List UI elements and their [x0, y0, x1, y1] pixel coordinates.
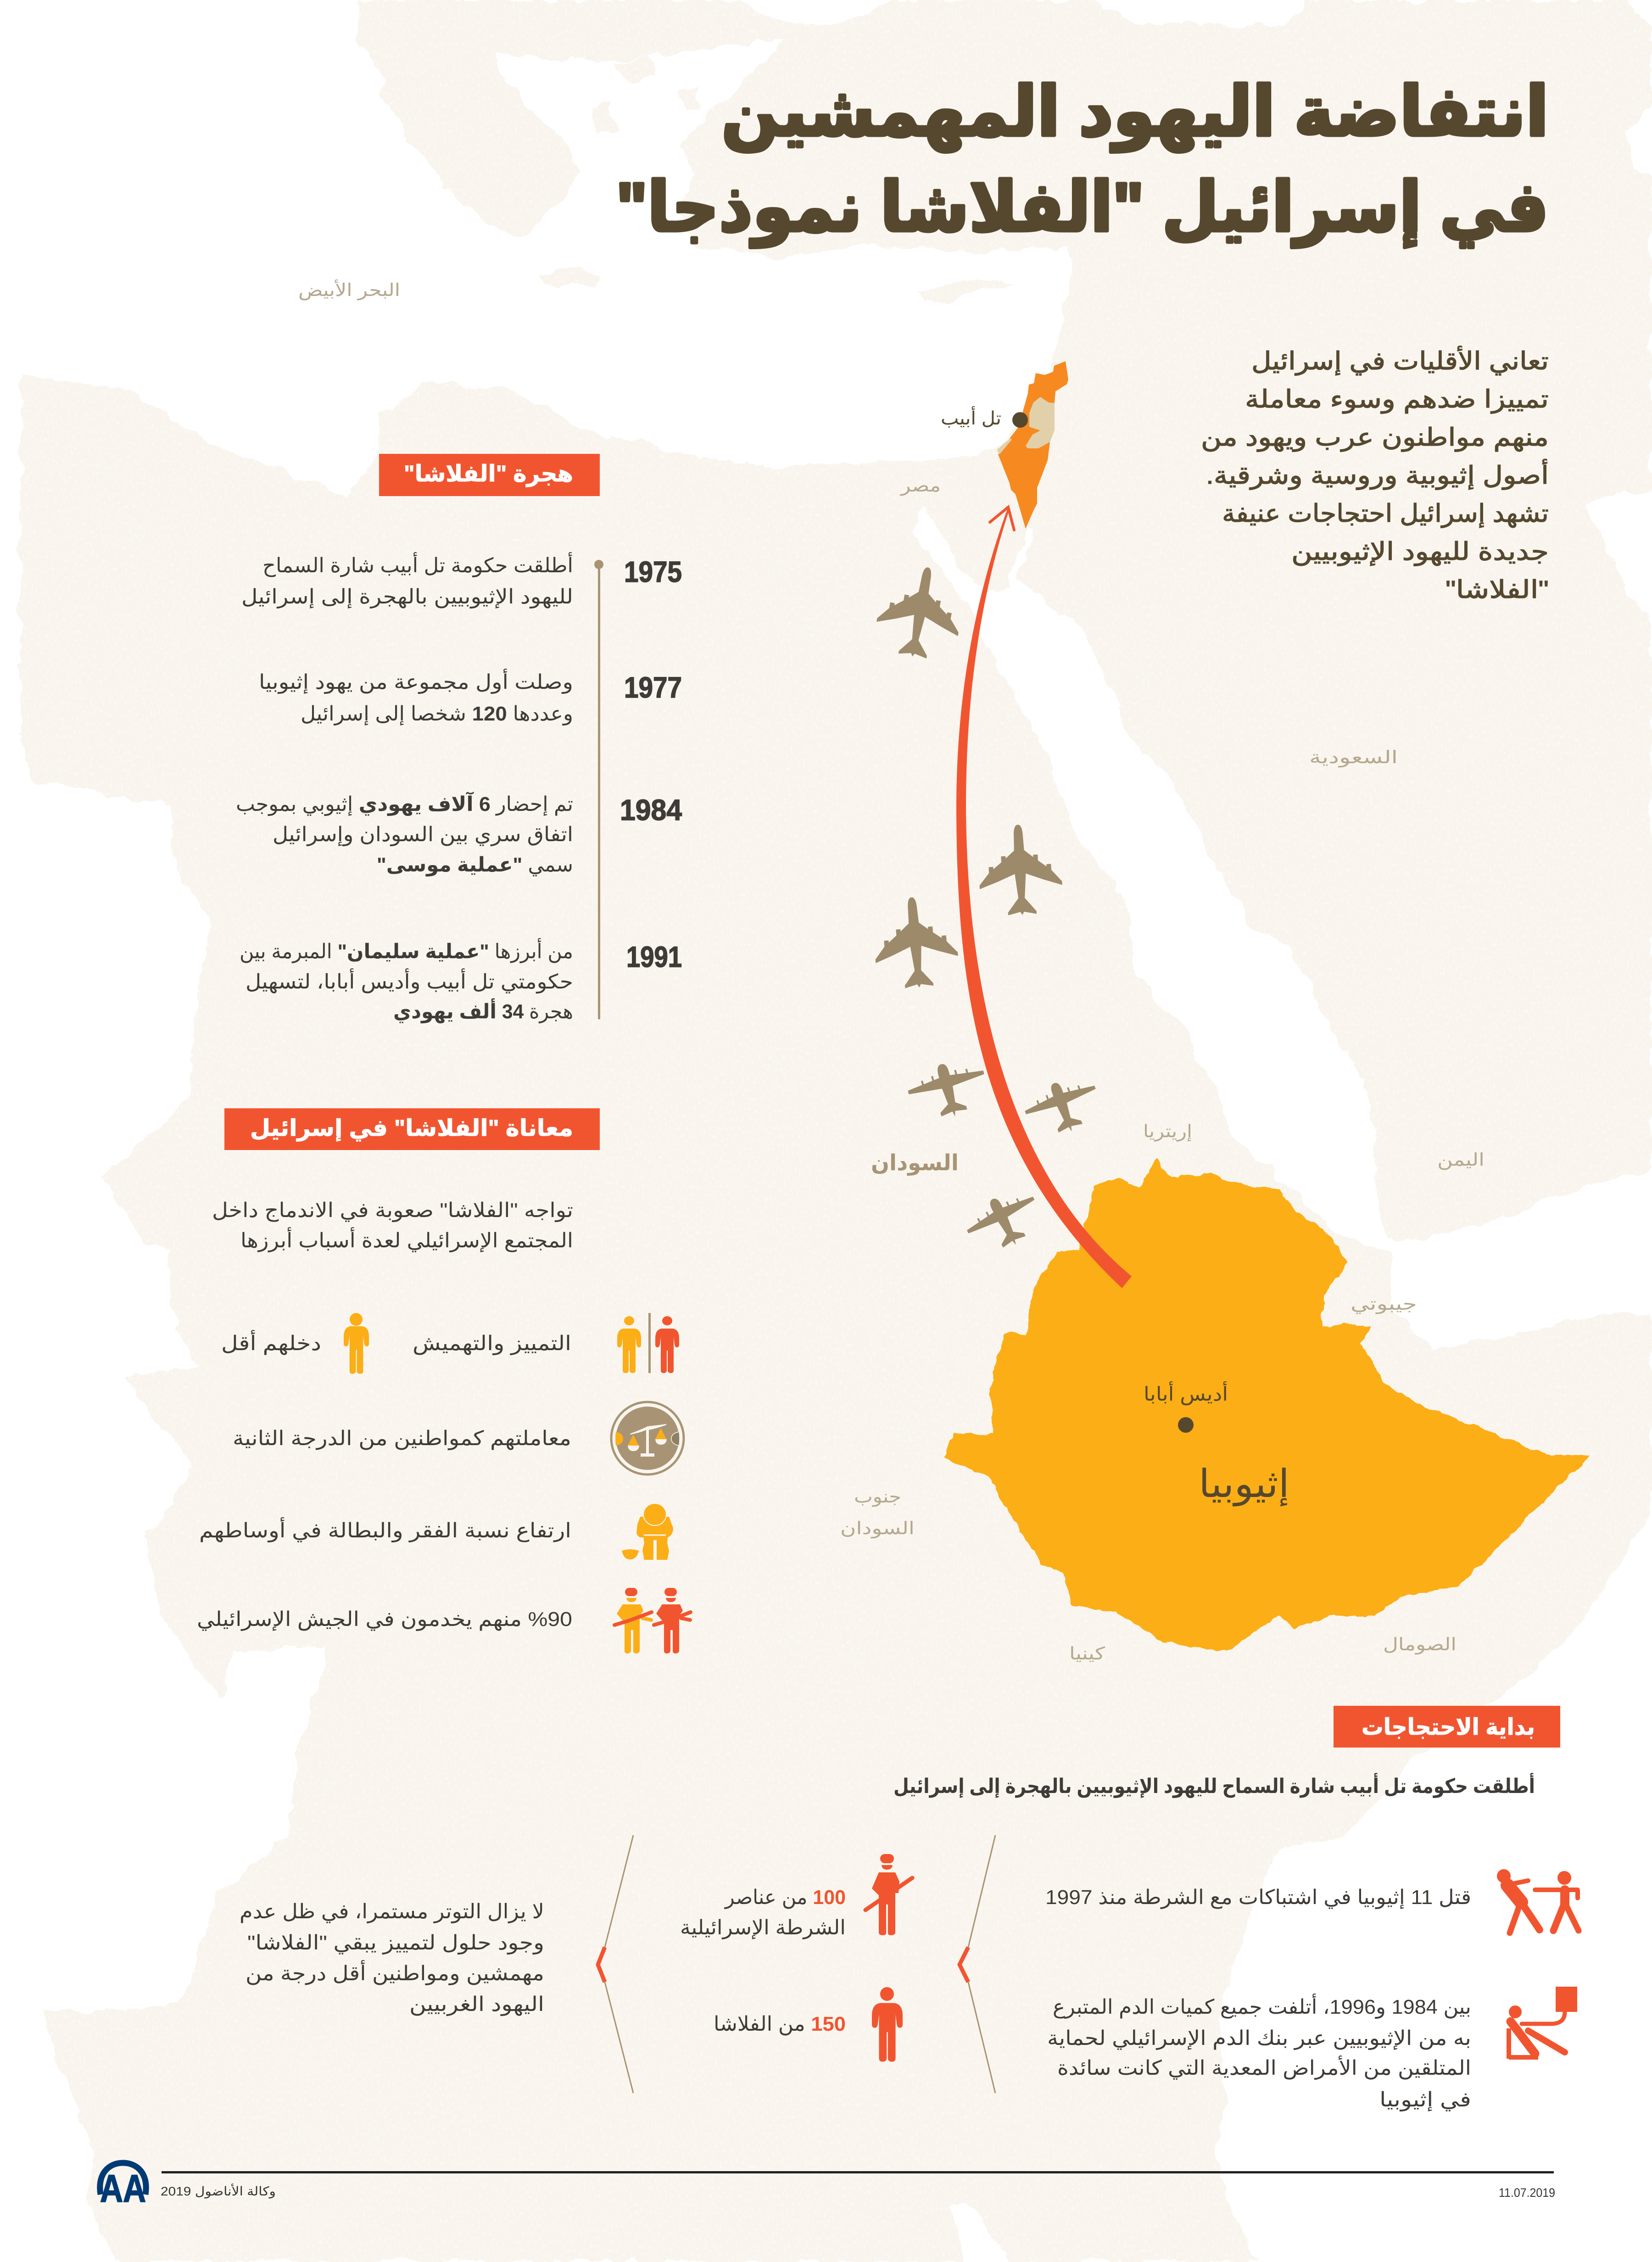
icon: soldier red — [654, 1588, 691, 1653]
timeline item 1984 — [236, 791, 682, 877]
map labels: الصومال — [1383, 1635, 1457, 1655]
timeline item 1977: وعددها 120 شخصا إلى إسرائيل — [301, 703, 573, 726]
footer rule — [162, 2171, 1554, 2173]
title: انتفاضة اليهود المهمشين — [721, 73, 1549, 152]
icon: blood donation — [1509, 1987, 1577, 2059]
text: Falasha count: 150 من الفلاشا — [714, 2013, 846, 2036]
arrow: migration route — [956, 507, 1132, 1288]
map labels: السودان — [840, 1519, 915, 1539]
panel: Falasha migration timeline — [236, 454, 682, 1023]
map: seas and gulfs — [727, 0, 1652, 2262]
timeline axis — [594, 560, 603, 1019]
text: blood bank: في إثيوبيا — [1379, 2089, 1471, 2111]
intro paragraph: أصول إثيوبية وروسية وشرقية. — [1206, 459, 1549, 490]
icon: police clash — [1497, 1869, 1579, 1933]
Tel Aviv marker and label: تل أبيب — [941, 406, 1001, 429]
intro text — [212, 1199, 573, 1252]
map labels: السودان — [871, 1151, 959, 1176]
logo: Anadolu Agency: AA — [100, 2167, 146, 2210]
text: blood bank: بين 1984 و1996، أتلفت جميع كميات الدم المتبرع — [1053, 1994, 1471, 2019]
divider arrow right — [960, 1835, 995, 2093]
footer: agency credit: وكالة الأناضول 2019 — [161, 2183, 276, 2199]
timeline item 1977: 1977 — [624, 671, 682, 704]
map: Israel with West Bank and Gaza — [997, 361, 1068, 529]
text: conclusion — [240, 1900, 544, 2016]
title: في إسرائيل "الفلاشا نموذجا" — [616, 168, 1549, 248]
panel: start of the protests — [240, 1706, 1579, 2111]
map labels: جنوب — [854, 1487, 901, 1507]
timeline item 1977: وصلت أول مجموعة من يهود إثيوبيا — [259, 669, 573, 694]
timeline item 1991: 1991 — [626, 940, 682, 973]
footer: date: 11.07.2019 — [1499, 2186, 1555, 2200]
text: poverty: ارتفاع نسبة الفقر والبطالة في أوساطهم — [199, 1517, 571, 1542]
timeline item 1977 — [259, 669, 682, 726]
icon: cargo plane 2 — [1019, 1071, 1106, 1144]
text: blood bank: به من الإثيوبيين عبر بنك الدم الإسرائيلي لحماية — [1047, 2027, 1471, 2050]
map labels: إريتريا — [1143, 1122, 1192, 1142]
text: blood bank: المتلقين من الأمراض المعدية التي كانت سائدة — [1057, 2055, 1471, 2080]
text: low income: دخلهم أقل — [221, 1330, 321, 1355]
icon: cargo plane 3 — [960, 1182, 1049, 1262]
icon: seated poor man with bowl — [622, 1503, 673, 1560]
timeline item 1984: 1984 — [620, 793, 682, 827]
map labels: السعودية — [1309, 748, 1398, 768]
Addis Ababa marker and label — [1144, 1381, 1228, 1433]
intro paragraph: "الفلاشا" — [1446, 576, 1549, 603]
text: police count — [680, 1886, 846, 1939]
text: conclusion: مهمشين ومواطنين أقل درجة من — [246, 1960, 544, 1985]
text: second-class citizens: معاملتهم كمواطنين من الدرجة الثانية — [233, 1427, 571, 1450]
icon: man, low income — [344, 1313, 369, 1374]
timeline item 1975 — [241, 552, 682, 609]
heading: migration: هجرة "الفلاشا" — [404, 461, 573, 487]
label: Ethiopia: إثيوبيا — [1199, 1462, 1289, 1507]
heading: suffering — [224, 1108, 600, 1150]
map labels — [298, 279, 1485, 1664]
timeline item 1991 — [240, 938, 682, 1023]
timeline item 1984: تم إحضار 6 آلاف يهودي إثيوبي بموجب — [236, 791, 573, 816]
icon: two men with divider — [617, 1313, 679, 1373]
map labels: اليمن — [1437, 1151, 1485, 1170]
text: conclusion: لا يزال التوتر مستمرا، في ظل عدم — [240, 1900, 544, 1923]
heading: protests: بداية الاحتجاجات — [1362, 1714, 1535, 1740]
icon: airliner 2 — [871, 894, 960, 991]
icon: soldier yellow — [614, 1588, 652, 1653]
text: conclusion: اليهود الغربيين — [409, 1993, 544, 2016]
panel: Falasha suffering in Israel — [197, 1108, 691, 1653]
intro text: تواجه "الفلاشا" صعوبة في الاندماج داخل — [212, 1199, 573, 1222]
map labels: جيبوتي — [1351, 1295, 1417, 1314]
intro paragraph: منهم مواطنون عرب ويهود من — [1201, 424, 1549, 452]
icon: man red — [872, 1987, 903, 2062]
icon: cargo plane 1 — [904, 1054, 993, 1127]
icon: airliner 1 — [872, 560, 969, 664]
text: police count: الشرطة الإسرائيلية — [680, 1916, 846, 1939]
timeline item 1984: اتفاق سري بين السودان وإسرائيل — [273, 823, 573, 846]
timeline item 1991: حكومتي تل أبيب وأديس أبابا، لتسهيل — [246, 968, 573, 994]
heading: suffering: معاناة "الفلاشا" في إسرائيل — [250, 1115, 573, 1142]
icon: police officer — [865, 1854, 912, 1935]
intro paragraph: تمييزا ضدهم وسوء معاملة — [1245, 385, 1549, 413]
map labels: مصر — [900, 476, 941, 496]
Addis Ababa marker and label: أديس أبابا — [1144, 1381, 1228, 1405]
map labels: البحر الأبيض — [298, 279, 400, 301]
intro text: المجتمع الإسرائيلي لعدة أسباب أبرزها — [240, 1227, 573, 1252]
intro paragraph: تشهد إسرائيل احتجاجات عنيفة — [1222, 500, 1549, 528]
icon: airliner 3 — [977, 822, 1064, 917]
subheading: أطلقت حكومة تل أبيب شارة السماح لليهود الإثيوبيين بالهجرة إلى إسرائيل — [893, 1773, 1535, 1798]
map: Ethiopia — [944, 1158, 1590, 1652]
timeline item 1991: هجرة 34 ألف يهودي — [393, 998, 573, 1023]
title — [616, 73, 1549, 248]
heading: protests — [1334, 1706, 1560, 1748]
text: conclusion: وجود حلول لتمييز يبقي "الفلاشا" — [247, 1932, 544, 1955]
divider arrow left — [598, 1835, 633, 2093]
timeline item 1975: أطلقت حكومة تل أبيب شارة السماح — [262, 552, 573, 577]
intro paragraph — [1201, 346, 1549, 603]
timeline item 1975: 1975 — [624, 555, 682, 588]
heading: migration — [379, 454, 600, 496]
timeline item 1984: سمي "عملية موسى" — [377, 854, 573, 877]
text: eleven killed: قتل 11 إثيوبيا في اشتباكات مع الشرطة منذ 1997 — [1045, 1886, 1471, 1909]
text: police count: 100 من عناصر — [724, 1886, 846, 1909]
timeline item 1975: لليهود الإثيوبيين بالهجرة إلى إسرائيل — [241, 586, 573, 609]
map labels: كينيا — [1069, 1644, 1105, 1664]
timeline item 1991: من أبرزها "عملية سليمان" المبرمة بين — [240, 938, 573, 963]
text: discrimination: التمييز والتهميش — [413, 1332, 571, 1355]
Tel Aviv marker and label — [941, 406, 1028, 429]
intro paragraph: جديدة لليهود الإثيوبيين — [1291, 538, 1549, 566]
intro paragraph: تعاني الأقليات في إسرائيل — [1251, 346, 1549, 375]
text: blood bank — [1047, 1994, 1471, 2111]
text: army service: %90 منهم يخدمون في الجيش الإسرائيلي — [197, 1608, 572, 1631]
icon: scales of justice — [611, 1402, 684, 1474]
